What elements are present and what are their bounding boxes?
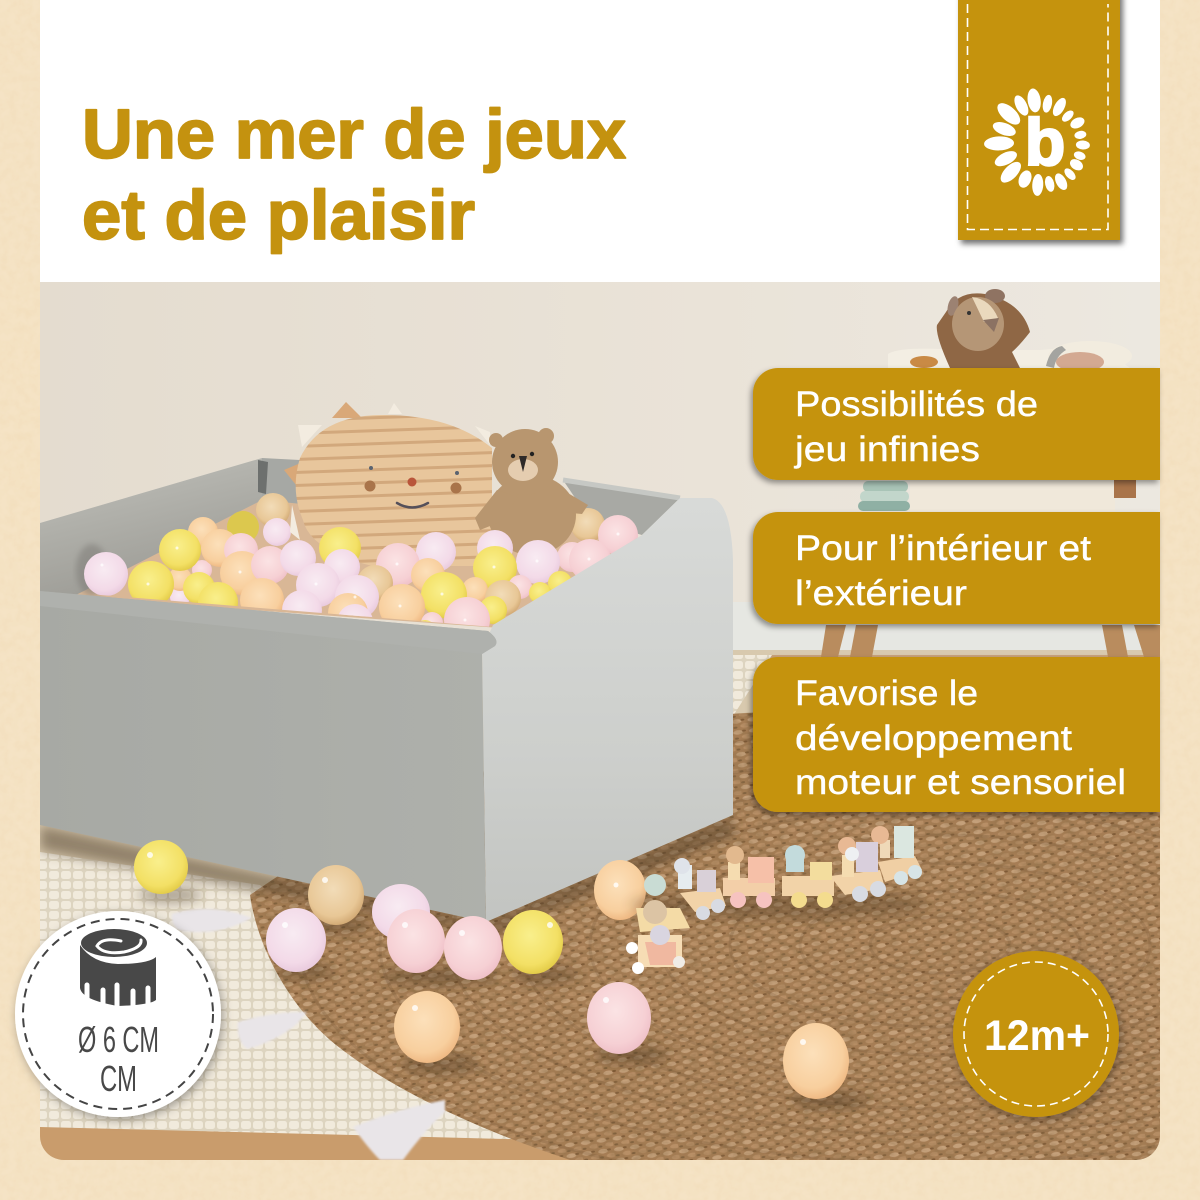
plush toy in basket	[1046, 346, 1104, 368]
engine	[626, 874, 690, 974]
cream rug tassels	[172, 909, 445, 1160]
ball pit shadow base	[72, 500, 640, 628]
baseboard	[733, 602, 822, 650]
carriage 3	[782, 845, 834, 908]
stool with basket and lion toy	[821, 289, 1160, 657]
floor ball shadows	[138, 887, 870, 1109]
callout: development: Favorise le	[795, 674, 978, 713]
callout: indoor outdoor	[753, 512, 1160, 624]
cream rug back corner	[733, 655, 772, 716]
ball pit side face	[482, 498, 733, 922]
icon: measuring tape roll	[80, 929, 156, 1012]
carriage 2	[830, 837, 886, 902]
wood floor strip	[40, 1127, 570, 1160]
basket	[888, 349, 950, 368]
title	[82, 95, 626, 254]
left inner wall	[40, 458, 268, 600]
cushion	[910, 480, 1115, 512]
callout: infinite play: Possibilités de	[795, 385, 1038, 424]
wall	[40, 282, 1160, 662]
callout: development: développement	[795, 719, 1072, 758]
callout: indoor outdoor: Pour l’intérieur et	[795, 529, 1091, 568]
callout: infinite play	[753, 368, 1160, 480]
carriage 1	[871, 826, 922, 885]
pillow: striped dino cushion	[284, 402, 492, 566]
icon: sunflower logo: b	[1025, 105, 1065, 179]
age badge: 12m+	[984, 1012, 1090, 1060]
corner strap	[258, 460, 268, 494]
brand tag with logo	[958, 0, 1120, 240]
size badge: CM	[100, 1058, 137, 1099]
lion toy	[910, 289, 1030, 368]
white header band	[40, 0, 1160, 283]
age badge	[953, 951, 1119, 1117]
callout: development: moteur et sensoriel	[795, 763, 1126, 802]
carriage 4	[723, 846, 775, 908]
wooden train toy	[626, 826, 930, 974]
product photo	[40, 282, 1200, 1195]
front balls	[100, 527, 620, 627]
stacking rings toy	[858, 481, 910, 511]
teddy bear	[475, 428, 588, 555]
ball pit inner walls	[40, 458, 680, 628]
size badge: Ø 6 CM	[78, 1019, 159, 1060]
front rim strip	[40, 591, 496, 654]
callout: development	[753, 657, 1160, 812]
callout: indoor outdoor: l’extérieur	[795, 574, 967, 613]
cream rug	[40, 852, 545, 1140]
stool legs	[821, 625, 1160, 657]
size badge	[15, 911, 221, 1117]
ball pit front face	[40, 591, 496, 922]
carriage 5	[674, 858, 726, 920]
right back wall	[563, 480, 680, 535]
floor balls	[134, 840, 849, 1099]
round jute rug	[250, 712, 1160, 1160]
title: et de plaisir	[82, 176, 475, 254]
title: Une mer de jeux	[82, 95, 626, 173]
rear balls	[84, 493, 638, 607]
box shadow on floor	[40, 815, 733, 935]
icon: sunflower logo	[984, 88, 1090, 196]
back inner wall	[262, 458, 300, 504]
floor	[40, 650, 1144, 886]
callout: infinite play: jeu infinies	[794, 430, 980, 469]
